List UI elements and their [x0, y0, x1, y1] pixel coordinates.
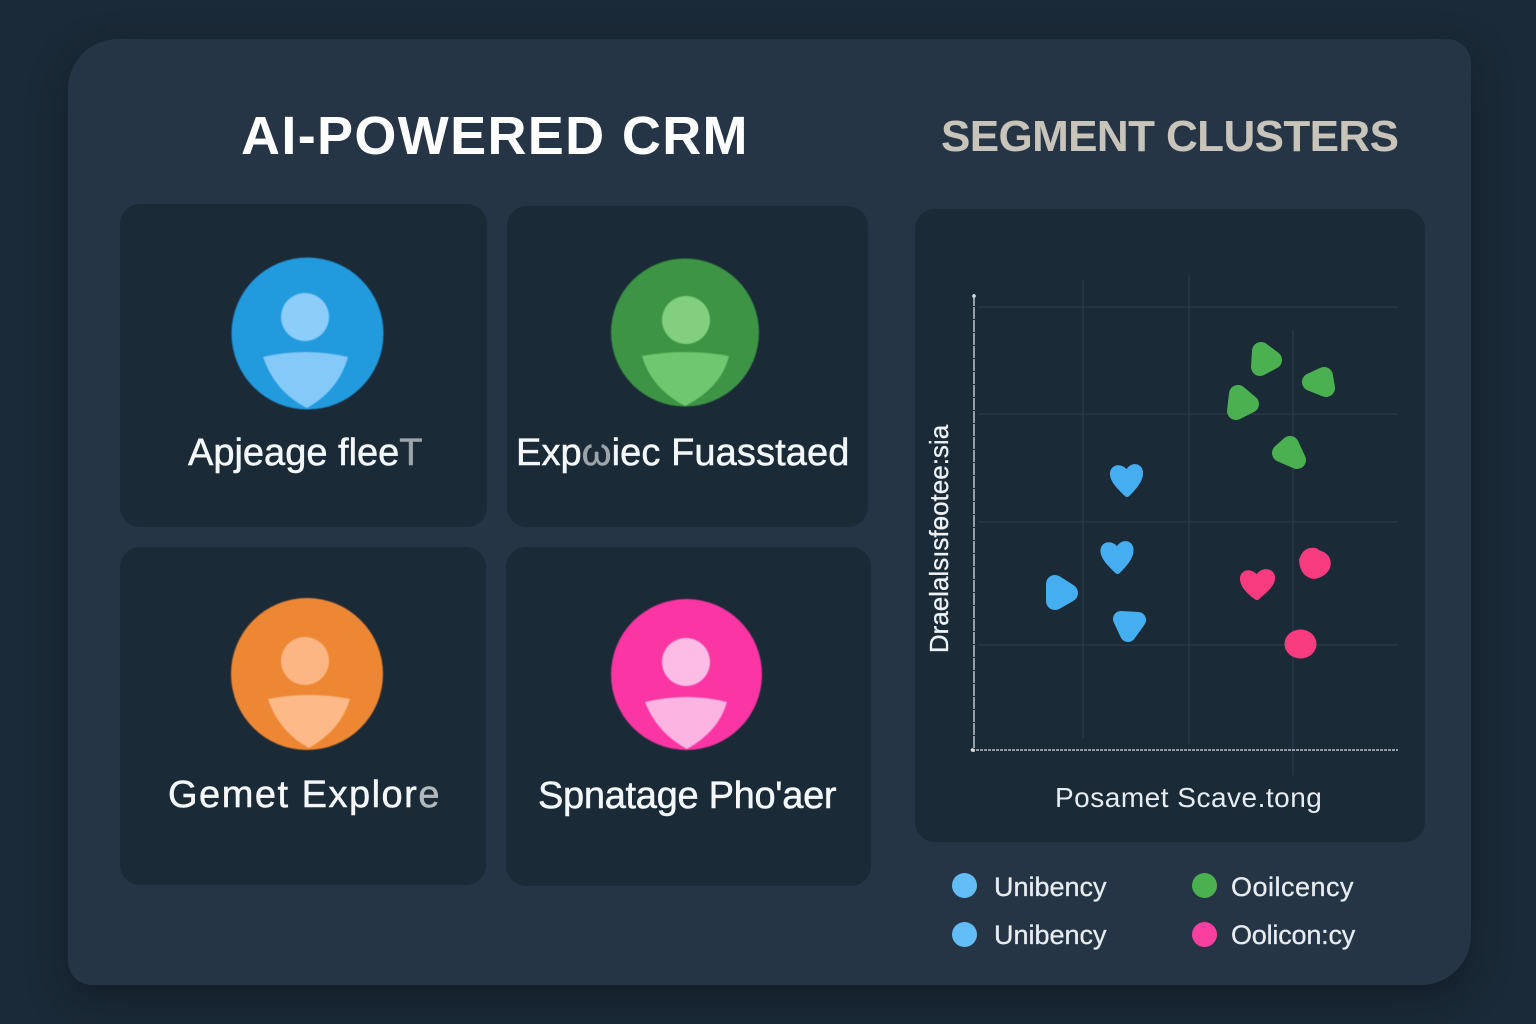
legend item	[952, 873, 977, 898]
label: Expωiec Fuasstaed	[516, 432, 849, 474]
panel: chart	[915, 209, 1425, 842]
legend label: Oolicon:cy	[1231, 920, 1355, 950]
legend label: Ooilcency	[1231, 872, 1354, 902]
y axis label: Draelalsısfɵotee:sia	[924, 425, 954, 653]
icon: pink persona	[610, 598, 763, 751]
blue cluster	[1055, 467, 1140, 634]
legend item	[952, 922, 977, 947]
icon: green persona	[610, 258, 760, 407]
panel: persona 2	[507, 206, 868, 527]
legend item	[1192, 873, 1217, 898]
heading: segment clusters: SEGMENT CLUSTERS	[941, 112, 1398, 161]
panel: persona 1	[120, 204, 487, 527]
icon: orange persona	[230, 597, 384, 751]
legend label: Unibency	[994, 872, 1107, 902]
legend label: Unibency	[994, 920, 1107, 950]
x axis label: Posamet Scave.tong	[1055, 782, 1322, 813]
scatter chart	[970, 275, 1398, 775]
label: Gemet Explore	[168, 774, 441, 816]
label: Apjeage fleeT	[188, 432, 423, 474]
label: Spnatage Pho'aer	[538, 775, 836, 817]
title: AI-POWERED CRM	[241, 106, 749, 166]
legend	[952, 872, 1356, 950]
legend item	[1192, 922, 1217, 947]
green cluster	[1236, 351, 1326, 460]
panel: persona 3	[120, 547, 486, 885]
pink cluster	[1243, 548, 1331, 658]
icon: blue persona	[230, 256, 384, 410]
panel: persona 4	[506, 547, 871, 886]
